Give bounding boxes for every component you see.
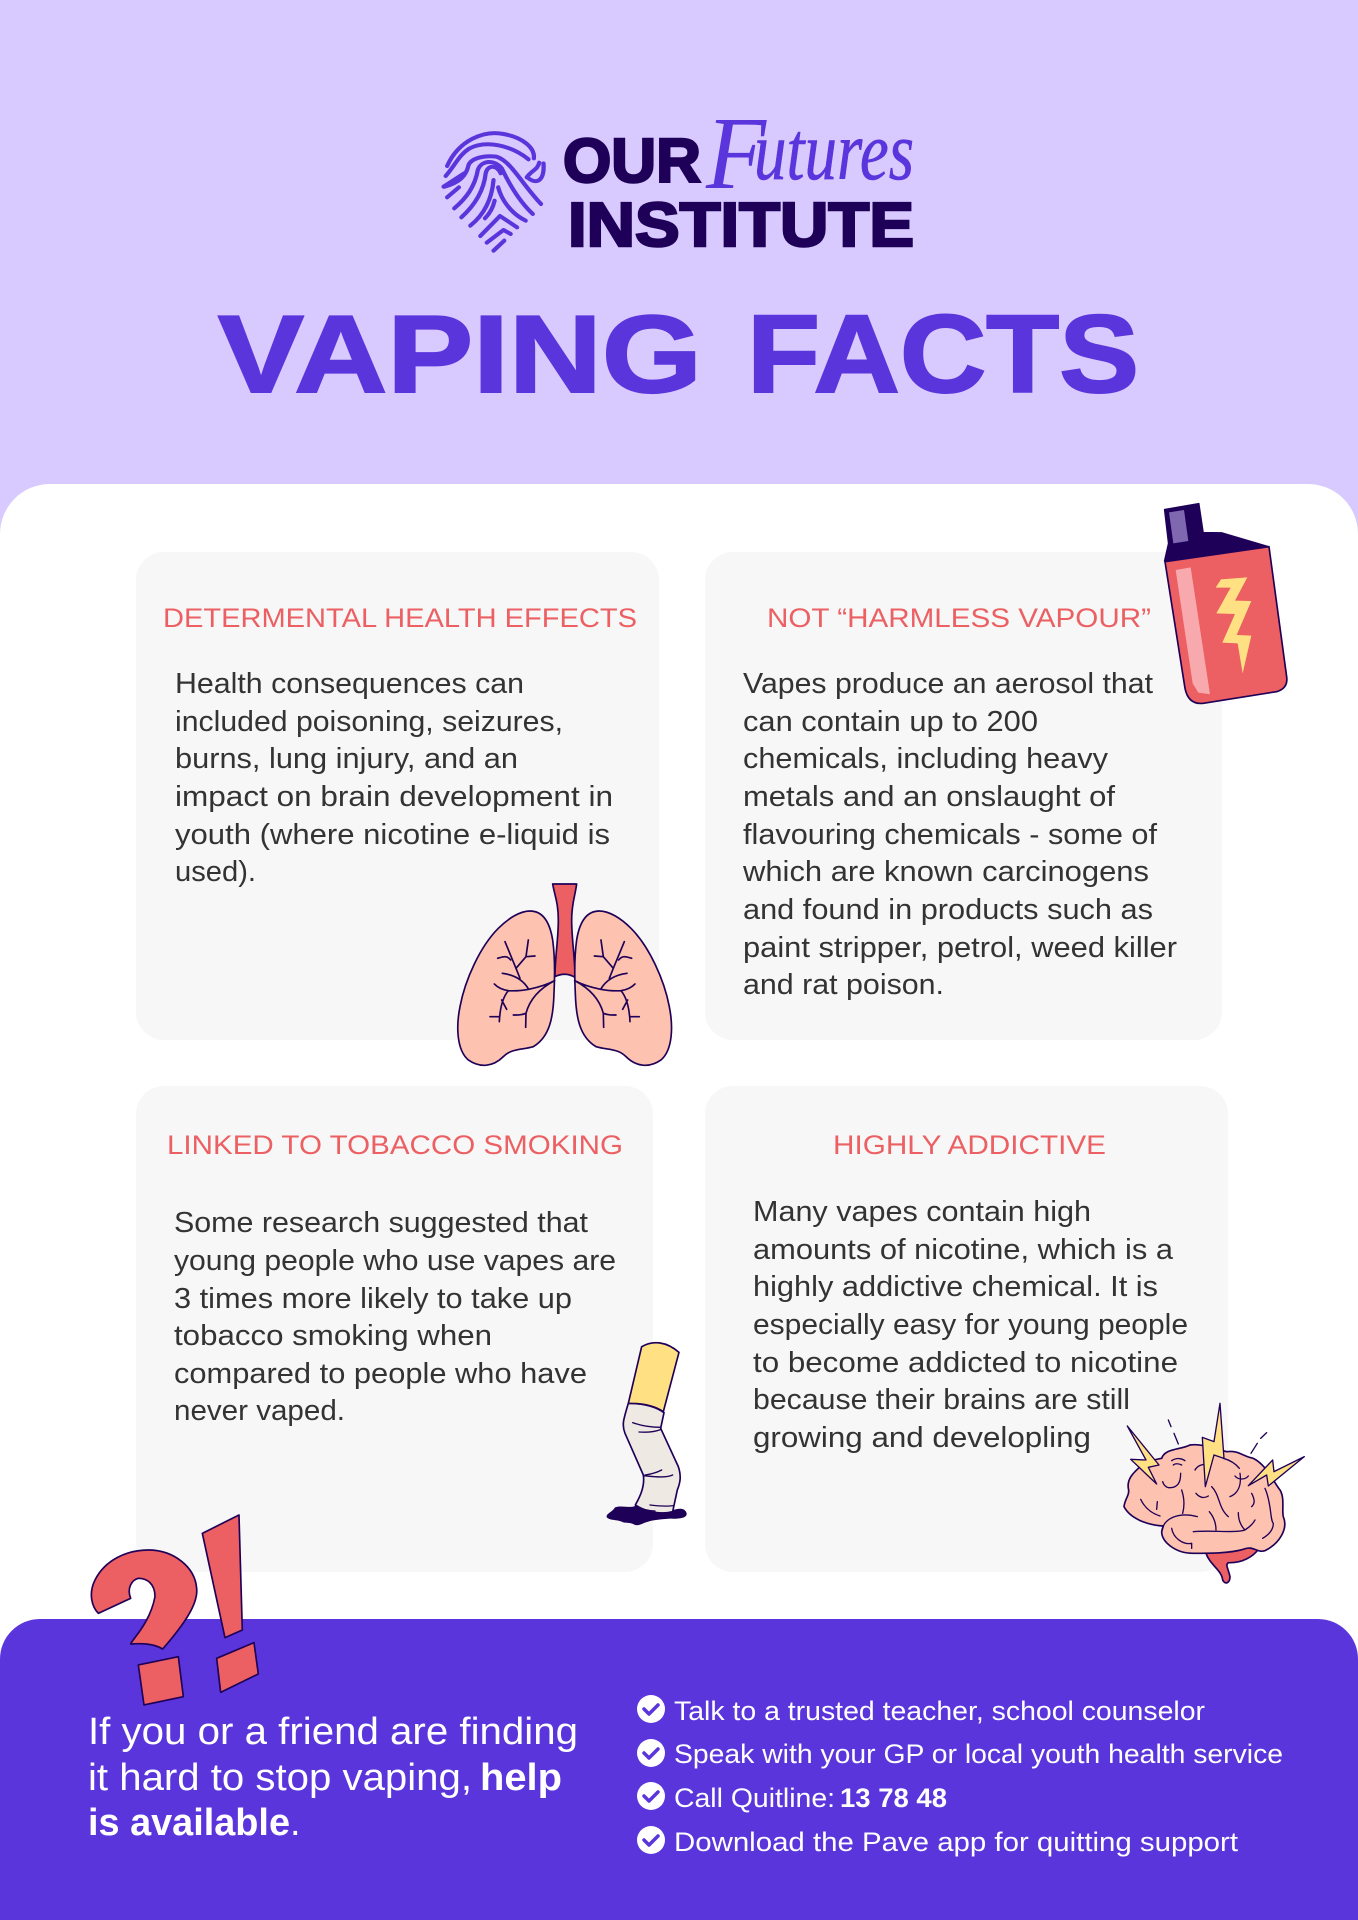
- text block: Some research suggested that: [174, 1207, 588, 1239]
- check item: GP: Speak with your GP or local youth health service: [674, 1739, 1283, 1769]
- text block: never vaped.: [174, 1395, 345, 1427]
- text block: highly addictive chemical. It is: [753, 1271, 1158, 1303]
- text block: chemicals, including heavy: [743, 743, 1109, 775]
- panel: highly addictive: [705, 1086, 1228, 1572]
- panel: linked to tobacco smoking: [136, 1086, 653, 1572]
- logo: [444, 96, 914, 260]
- check item: Quitline: Call Quitline:: [674, 1783, 835, 1813]
- help message: If you or a friend are finding: [88, 1711, 578, 1753]
- icon: question and exclamation marks: [91, 1515, 258, 1705]
- icon: fingerprint: [444, 133, 544, 251]
- text block: to become addicted to nicotine: [753, 1347, 1178, 1379]
- panel: detrimental health effects: [136, 552, 659, 1040]
- text block: tobacco smoking when: [174, 1320, 492, 1352]
- help message: it hard to stop vaping,: [88, 1757, 472, 1799]
- text block: flavouring chemicals - some of: [743, 819, 1158, 851]
- check item: Quitline: 13 78 48: [840, 1783, 947, 1813]
- support list: [637, 1695, 1283, 1857]
- text block: included poisoning, seizures,: [175, 706, 563, 738]
- white content panel: [0, 484, 1358, 1660]
- text block: and found in products such as: [743, 894, 1153, 926]
- text block: [175, 668, 613, 888]
- text block: paint stripper, petrol, weed killer: [743, 932, 1177, 964]
- text block: amounts of nicotine, which is a: [753, 1234, 1174, 1266]
- text block: compared to people who have: [174, 1358, 587, 1390]
- heading: LINKED TO TOBACCO SMOKING: [167, 1130, 623, 1160]
- icon: cigarette butt: [607, 1343, 687, 1525]
- text block: 3 times more likely to take up: [174, 1283, 572, 1315]
- wordmark: Futures: [705, 96, 914, 211]
- text block: [174, 1207, 616, 1427]
- help message: help: [480, 1757, 562, 1799]
- text block: growing and developling: [753, 1422, 1091, 1454]
- text block: young people who use vapes are: [174, 1245, 616, 1277]
- text block: [753, 1196, 1188, 1454]
- text block: especially easy for young people: [753, 1309, 1188, 1341]
- heading: DETERMENTAL HEALTH EFFECTS: [163, 603, 637, 633]
- text block: burns, lung injury, and an: [175, 743, 518, 775]
- check item: Pave app: Download the Pave app for quitting support: [674, 1827, 1239, 1857]
- title: [218, 293, 1139, 416]
- help message: .: [290, 1802, 301, 1844]
- text block: impact on brain development in: [175, 781, 613, 813]
- icon: vape device: [1164, 503, 1287, 703]
- text block: because their brains are still: [753, 1384, 1130, 1416]
- check item: Quitline: [637, 1782, 947, 1813]
- help message: [88, 1711, 578, 1844]
- text block: Health consequences can: [175, 668, 524, 700]
- wordmark: INSTITUTE: INSTITUTE: [568, 191, 914, 260]
- title: VAPING: [218, 293, 702, 416]
- text block: Many vapes contain high: [753, 1196, 1091, 1228]
- text block: Vapes produce an aerosol that: [743, 668, 1153, 700]
- wordmark: Futures: utures: [754, 105, 914, 198]
- wordmark: Futures: F: [705, 96, 767, 211]
- text block: can contain up to 200: [743, 706, 1038, 738]
- text block: used).: [175, 856, 256, 888]
- text block: youth (where nicotine e-liquid is: [175, 819, 610, 851]
- heading: HIGHLY ADDICTIVE: [833, 1130, 1106, 1160]
- text block: metals and an onslaught of: [743, 781, 1116, 813]
- header background: [0, 0, 1358, 560]
- footer band: [0, 1619, 1358, 1920]
- text block: [742, 668, 1177, 1001]
- icon: brain with lightning: [1124, 1403, 1304, 1583]
- icon: lungs: [458, 884, 672, 1065]
- check item: teacher: Talk to a trusted teacher, school counselor: [674, 1696, 1205, 1726]
- heading: NOT “HARMLESS VAPOUR”: [767, 603, 1151, 633]
- wordmark: OUR: OUR: [563, 127, 701, 196]
- title: FACTS: [747, 293, 1139, 416]
- text block: which are known carcinogens: [742, 856, 1149, 888]
- help message: is available: [88, 1802, 290, 1844]
- panel: not harmless vapour: [705, 552, 1222, 1040]
- text block: and rat poison.: [743, 969, 944, 1001]
